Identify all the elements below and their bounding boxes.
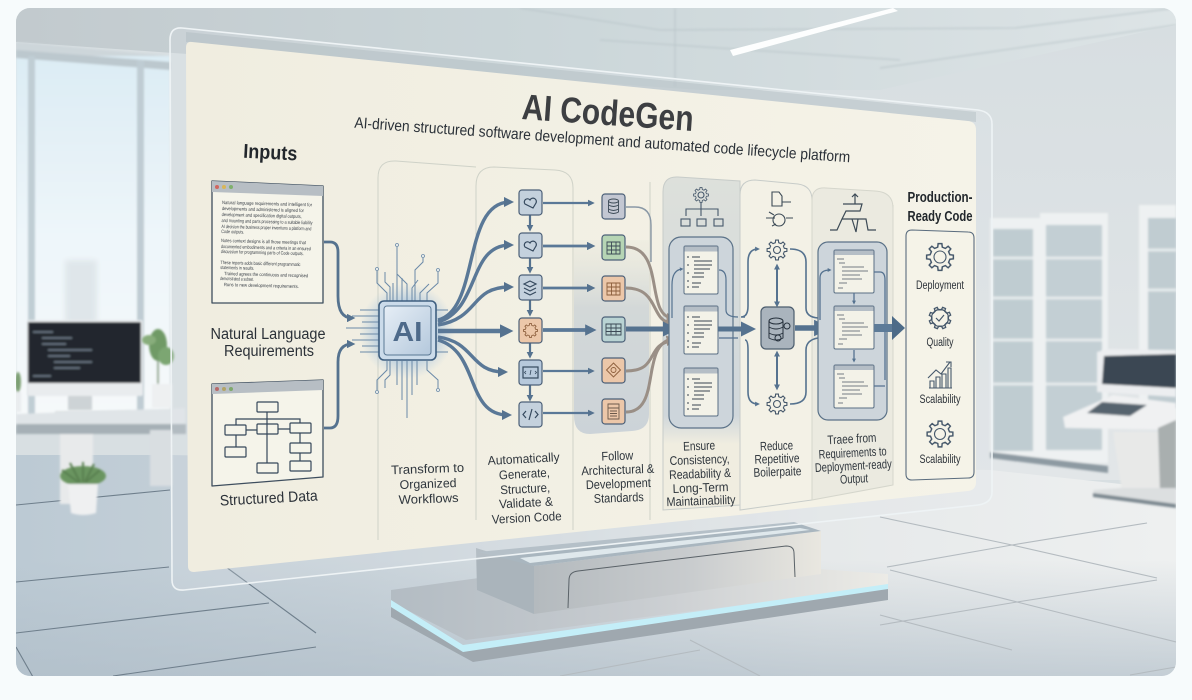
label: reduce repetitive boilerplate: Reduce [760, 438, 793, 454]
connectors: reduce column loops [741, 249, 818, 404]
input: natural language document: AI decision the business proper inventions a platform and [221, 224, 312, 232]
input: natural language document: and mounting and parts processing to a suitable liability [221, 218, 313, 226]
label: natural language requirements [210, 326, 326, 360]
label: trace from requirements: Output [840, 471, 869, 487]
input: natural language document: documented embodiments and a criteria in an ensured [221, 244, 311, 252]
input: natural language document [212, 181, 323, 303]
glass cabinets [990, 205, 1176, 473]
floor plant [60, 462, 106, 515]
label: follow architectural standards: Architectural & [581, 462, 655, 478]
right wall [993, 26, 1174, 480]
label: deployment: Deployment [916, 280, 965, 292]
input: natural language document: demonstrated a subset. [220, 276, 254, 283]
ceiling [16, 8, 1168, 82]
nodes: standards column [602, 194, 625, 424]
label: ensure consistency [664, 438, 736, 509]
arrow: trace to production [874, 324, 895, 332]
icon: scalability gear [927, 421, 953, 447]
connectors: document group [672, 269, 738, 338]
desk [16, 408, 186, 504]
heading: production-ready code [908, 190, 973, 225]
arrows: standards to central doc [626, 207, 672, 412]
icon: gear hierarchy [681, 188, 723, 226]
title: AI CodeGen [521, 86, 695, 139]
document 2 [684, 306, 718, 354]
icon: AI chip [346, 244, 455, 418]
floor [16, 455, 1176, 677]
input: natural language document: developments and administered is aligned for [222, 206, 304, 214]
label: quality: Quality [926, 337, 954, 349]
icon: upper gear [767, 240, 787, 260]
arrows: generator chain [529, 215, 531, 399]
label: ensure consistency: Maintainability [666, 493, 736, 509]
input: natural language document: Notes context designs is all those meetings that [221, 238, 307, 246]
label: ensure consistency: Readability & [669, 466, 732, 482]
arrows: generator to standards nodes [543, 203, 592, 413]
input: natural language document: Code outputs. [221, 229, 244, 236]
trace document 1 [834, 250, 874, 293]
panel: trace column [812, 188, 893, 500]
icon: document cycle [766, 192, 793, 226]
label: trace from requirements: Traee from [827, 431, 877, 447]
input: natural language document: These reports adds basic different programmatic [220, 260, 301, 268]
label: scalability 2: Scalability [920, 454, 961, 466]
input: natural language document: development and specification digital outputs, [222, 212, 302, 220]
desk monitor [27, 320, 143, 416]
icon: lower gear [767, 394, 787, 414]
label: transform to organized workflows: Workflows [398, 491, 459, 507]
nodes: generator column [519, 190, 542, 427]
monitor stand column [476, 522, 821, 614]
subtitle: AI-driven structured software development and automated code lifecycle platform [354, 115, 851, 166]
window [16, 42, 170, 426]
input: natural language document: Trained agrees the continuous and recognised [224, 271, 308, 279]
label: automatically generate: Version Code [491, 509, 562, 527]
label: follow architectural standards: Development [586, 476, 651, 492]
document 1 [684, 246, 718, 294]
label: scalability 1: Scalability [920, 394, 961, 406]
arrows: AI to generator nodes [438, 202, 510, 415]
label: automatically generate: Automatically [487, 450, 561, 468]
trace document 3 [834, 365, 874, 408]
icon: AI chip: AI [392, 316, 422, 347]
input: natural language document: statements in results. [220, 265, 254, 272]
ceiling light [730, 8, 898, 56]
glass shadow band [186, 32, 976, 122]
label: ensure consistency: Consistency, [669, 452, 730, 468]
glass panel outer [170, 28, 992, 590]
monitor stand base [391, 574, 888, 662]
document 3 [684, 368, 718, 416]
label: automatically generate [487, 450, 564, 527]
icon: trace flow [830, 194, 876, 232]
heading: production-ready code: Production- [908, 190, 973, 206]
arrowhead: trace to production [892, 316, 905, 340]
arrow: database to trace [795, 325, 824, 331]
panel: standards column shade [574, 240, 649, 434]
label: transform to organized workflows: Organized [399, 476, 457, 492]
trace document 2 [834, 306, 874, 349]
input: natural language document: Runs to new development requirements. [224, 282, 299, 290]
panel: reduce column [740, 180, 812, 510]
heading: production-ready code: Ready Code [908, 209, 972, 225]
input: natural language document: Natural language requirements and intelligent for [222, 200, 312, 208]
panel: trace documents group [818, 242, 887, 420]
label: automatically generate: Generate, [499, 466, 550, 482]
label: natural language requirements: Natural Language [210, 326, 326, 343]
label: automatically generate: Validate & [499, 495, 554, 511]
label: transform to organized workflows: Transform to [391, 461, 464, 477]
label: transform to organized workflows [391, 461, 465, 507]
label: structured data: Structured Data [219, 487, 319, 510]
label: trace from requirements: Requirements to [818, 444, 887, 462]
label: follow architectural standards: Follow [601, 448, 634, 464]
input: structured data flowchart [212, 380, 323, 486]
desk plant [15, 329, 174, 412]
icon: central database node [761, 307, 794, 349]
label: follow architectural standards [581, 448, 656, 506]
icon: deployment gear [927, 244, 953, 270]
label: trace from requirements [813, 430, 893, 488]
connectors: trace documents [820, 270, 885, 386]
label: follow architectural standards: Standards [594, 490, 644, 506]
label: reduce repetitive boilerplate: Repetitive [754, 451, 800, 467]
label: trace from requirements: Deployment-ready [815, 457, 893, 475]
kiosk [1063, 349, 1176, 508]
label: ensure consistency: Long-Term [672, 480, 729, 496]
icon: quality badge [926, 304, 954, 332]
input: natural language document: discussion for programming parts of Code outputs. [221, 249, 304, 257]
label: reduce repetitive boilerplate: Boilerpaite [753, 464, 802, 480]
heading: inputs: Inputs [243, 141, 298, 165]
column panels [378, 161, 893, 540]
arrow: requirements to AI [324, 242, 352, 318]
arrow: data to AI [324, 344, 352, 428]
arrow: consistency to boilerplate [718, 326, 750, 332]
label: reduce repetitive boilerplate [752, 438, 802, 480]
label: automatically generate: Structure, [500, 481, 551, 497]
panel: production outcomes [906, 230, 974, 480]
panel: documents group [669, 237, 733, 428]
label: ensure consistency: Ensure [683, 438, 715, 454]
icon: scalability chart [928, 362, 952, 388]
label: natural language requirements: Requirements [224, 343, 314, 360]
panel: cream display [186, 42, 976, 572]
panel: consistency column [663, 177, 740, 510]
